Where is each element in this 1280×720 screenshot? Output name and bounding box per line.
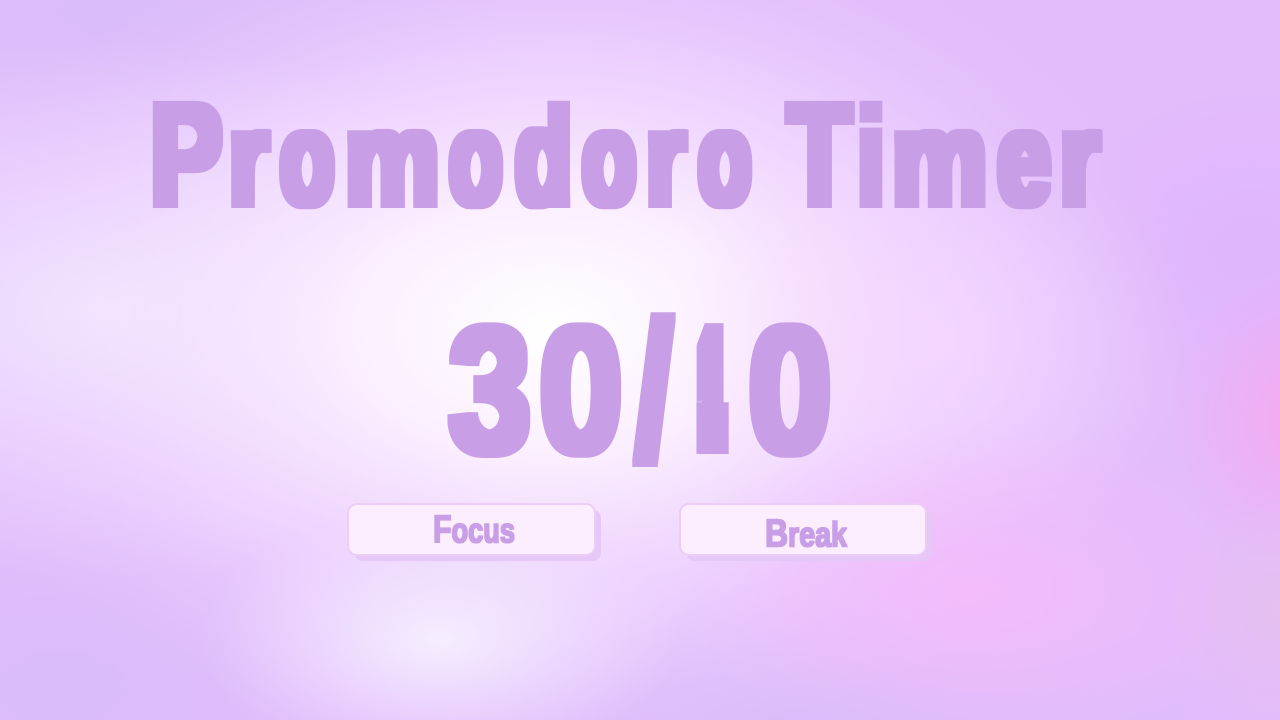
title: m [892, 85, 987, 232]
title: T [788, 74, 851, 235]
title: o [583, 85, 636, 232]
timer value 30/10: / [636, 281, 672, 501]
title: o [281, 85, 334, 232]
title: o [699, 85, 751, 232]
title: o [450, 85, 502, 232]
timer value 30/10: 1 [703, 313, 721, 464]
title: d [515, 81, 571, 234]
title: i [858, 81, 884, 234]
timer value 30/10: 0 [748, 290, 831, 491]
timer value 30/10: 3 [449, 290, 531, 491]
title: r [1060, 85, 1099, 232]
button face [348, 504, 595, 555]
title: m [345, 85, 439, 232]
title: r [229, 85, 268, 232]
title: P [151, 74, 222, 235]
title: r [646, 85, 685, 232]
title: e [998, 85, 1050, 232]
button: Focus [348, 504, 601, 561]
button shadow [354, 509, 601, 561]
button: Break [680, 504, 932, 561]
label: Focus: Focus [433, 508, 515, 552]
button shadow [686, 509, 932, 561]
timer value 30/10: 0 [540, 290, 622, 491]
label: Break: Break [765, 512, 847, 556]
button face [680, 504, 926, 555]
